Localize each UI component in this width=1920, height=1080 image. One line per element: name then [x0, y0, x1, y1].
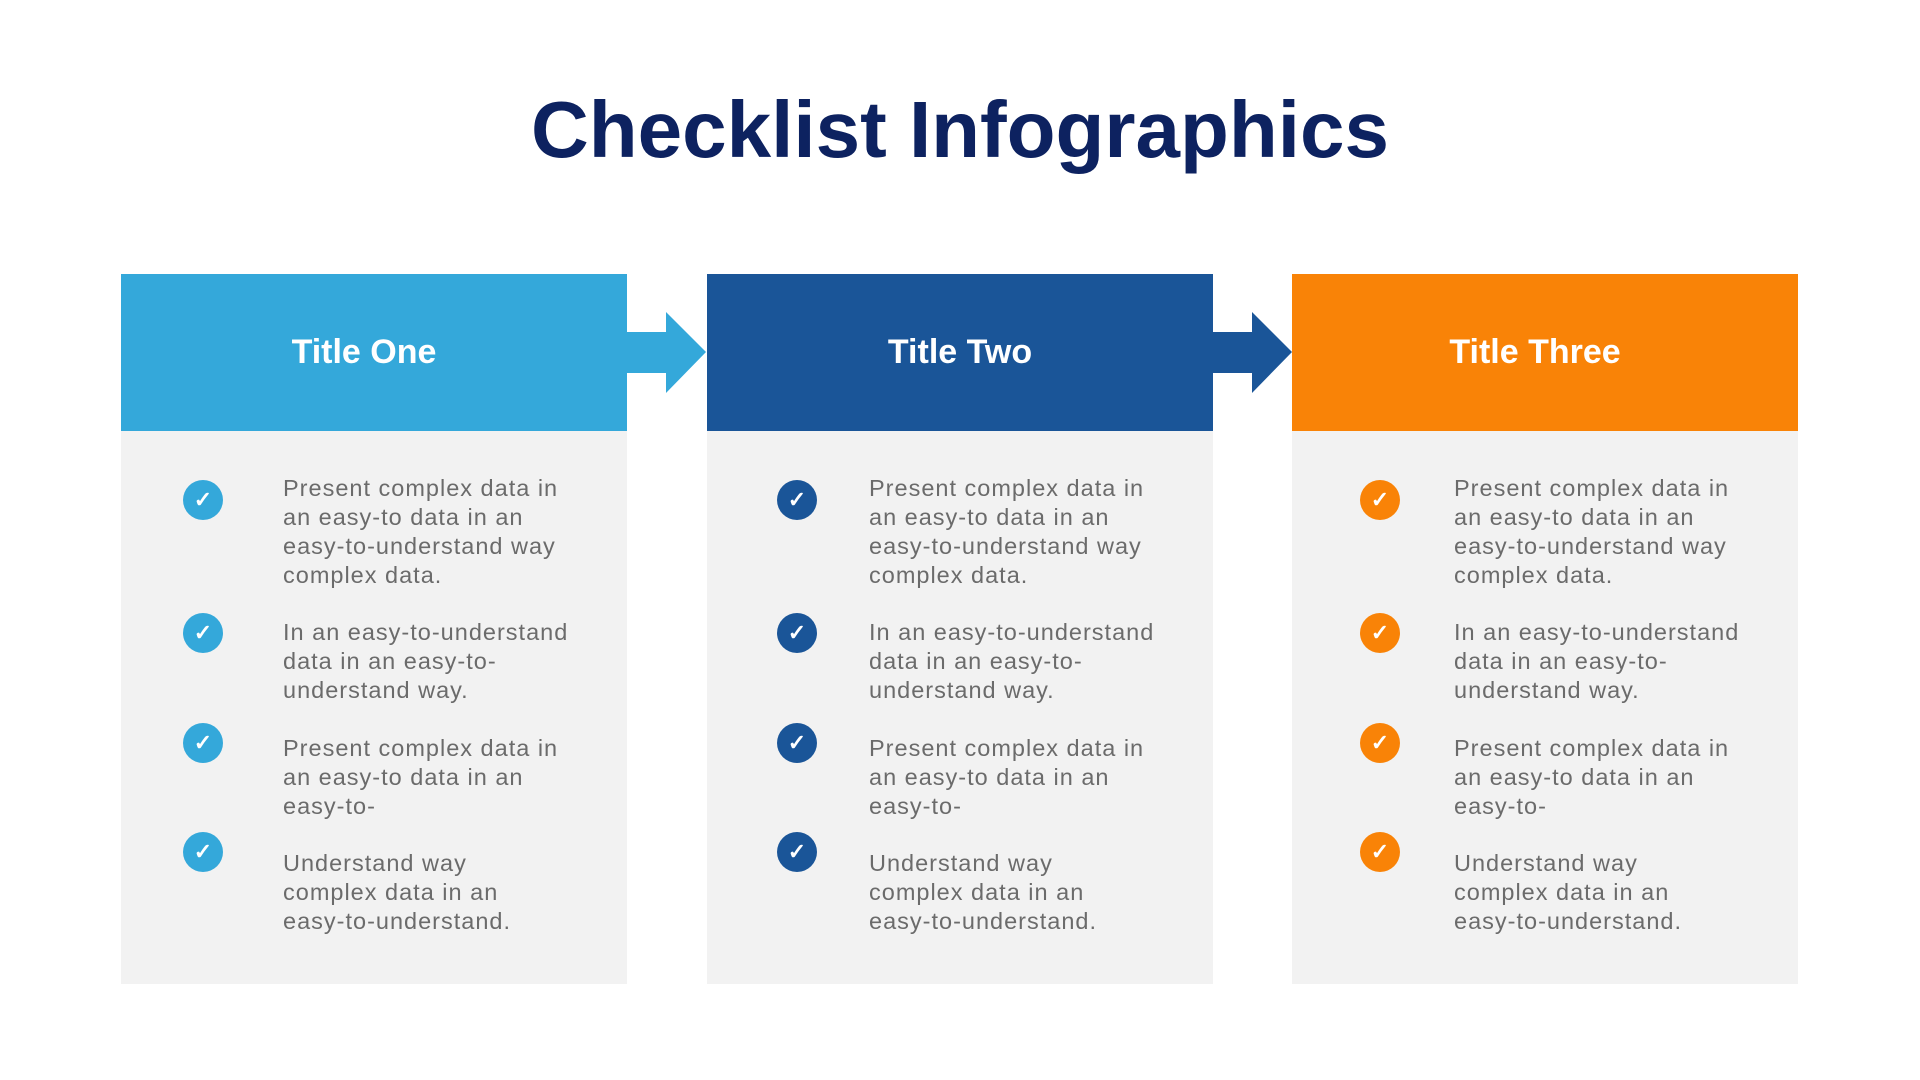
text 4: Understand way complex data in an easy-to-understand.	[1454, 850, 1682, 934]
text 4: Understand way complex data in an easy-to-understand.	[869, 850, 1097, 934]
title: Checklist Infographics	[531, 85, 1389, 174]
header: title two	[707, 274, 1213, 431]
check 3: ✓	[788, 730, 806, 755]
arrow 1	[627, 312, 706, 393]
text 3: Present complex data in an easy-to data in an easy-to-	[1454, 735, 1729, 819]
check 4	[183, 832, 223, 872]
check 4	[1360, 832, 1400, 872]
check 3	[777, 723, 817, 763]
text 3: Present complex data in an easy-to data in an easy-to-	[283, 735, 558, 819]
check 2	[1360, 613, 1400, 653]
check 1	[777, 480, 817, 520]
check 1	[183, 480, 223, 520]
text 3: Present complex data in an easy-to data in an easy-to-	[869, 735, 1144, 819]
text 1: Present complex data in an easy-to data in an easy-to-understand way complex data.	[869, 475, 1144, 588]
header: title one: Title One	[292, 333, 436, 371]
panel: title three	[1292, 274, 1798, 984]
header: title three: Title Three	[1449, 333, 1621, 371]
check 3	[183, 723, 223, 763]
text 2: In an easy-to-understand data in an easy-to-understand way.	[1454, 619, 1739, 703]
check 4: ✓	[1371, 839, 1389, 864]
panel: title two	[707, 274, 1213, 984]
check 2: ✓	[788, 620, 806, 645]
arrow 2	[1213, 312, 1292, 393]
check 4: ✓	[194, 839, 212, 864]
check 2: ✓	[1371, 620, 1389, 645]
text 1: Present complex data in an easy-to data in an easy-to-understand way complex data.	[283, 475, 558, 588]
check 1: ✓	[1371, 487, 1389, 512]
panel: title one	[121, 274, 627, 984]
text 1: Present complex data in an easy-to data in an easy-to-understand way complex data.	[1454, 475, 1729, 588]
check 2	[183, 613, 223, 653]
check 2: ✓	[194, 620, 212, 645]
check 1: ✓	[194, 487, 212, 512]
check 4: ✓	[788, 839, 806, 864]
header: title three	[1292, 274, 1798, 431]
text 2: In an easy-to-understand data in an easy-to-understand way.	[869, 619, 1154, 703]
check 1: ✓	[788, 487, 806, 512]
check 1	[1360, 480, 1400, 520]
check 4	[777, 832, 817, 872]
header: title two: Title Two	[888, 333, 1032, 371]
check 2	[777, 613, 817, 653]
check 3	[1360, 723, 1400, 763]
text 2: In an easy-to-understand data in an easy-to-understand way.	[283, 619, 568, 703]
check 3: ✓	[194, 730, 212, 755]
text 4: Understand way complex data in an easy-to-understand.	[283, 850, 511, 934]
header: title one	[121, 274, 627, 431]
check 3: ✓	[1371, 730, 1389, 755]
